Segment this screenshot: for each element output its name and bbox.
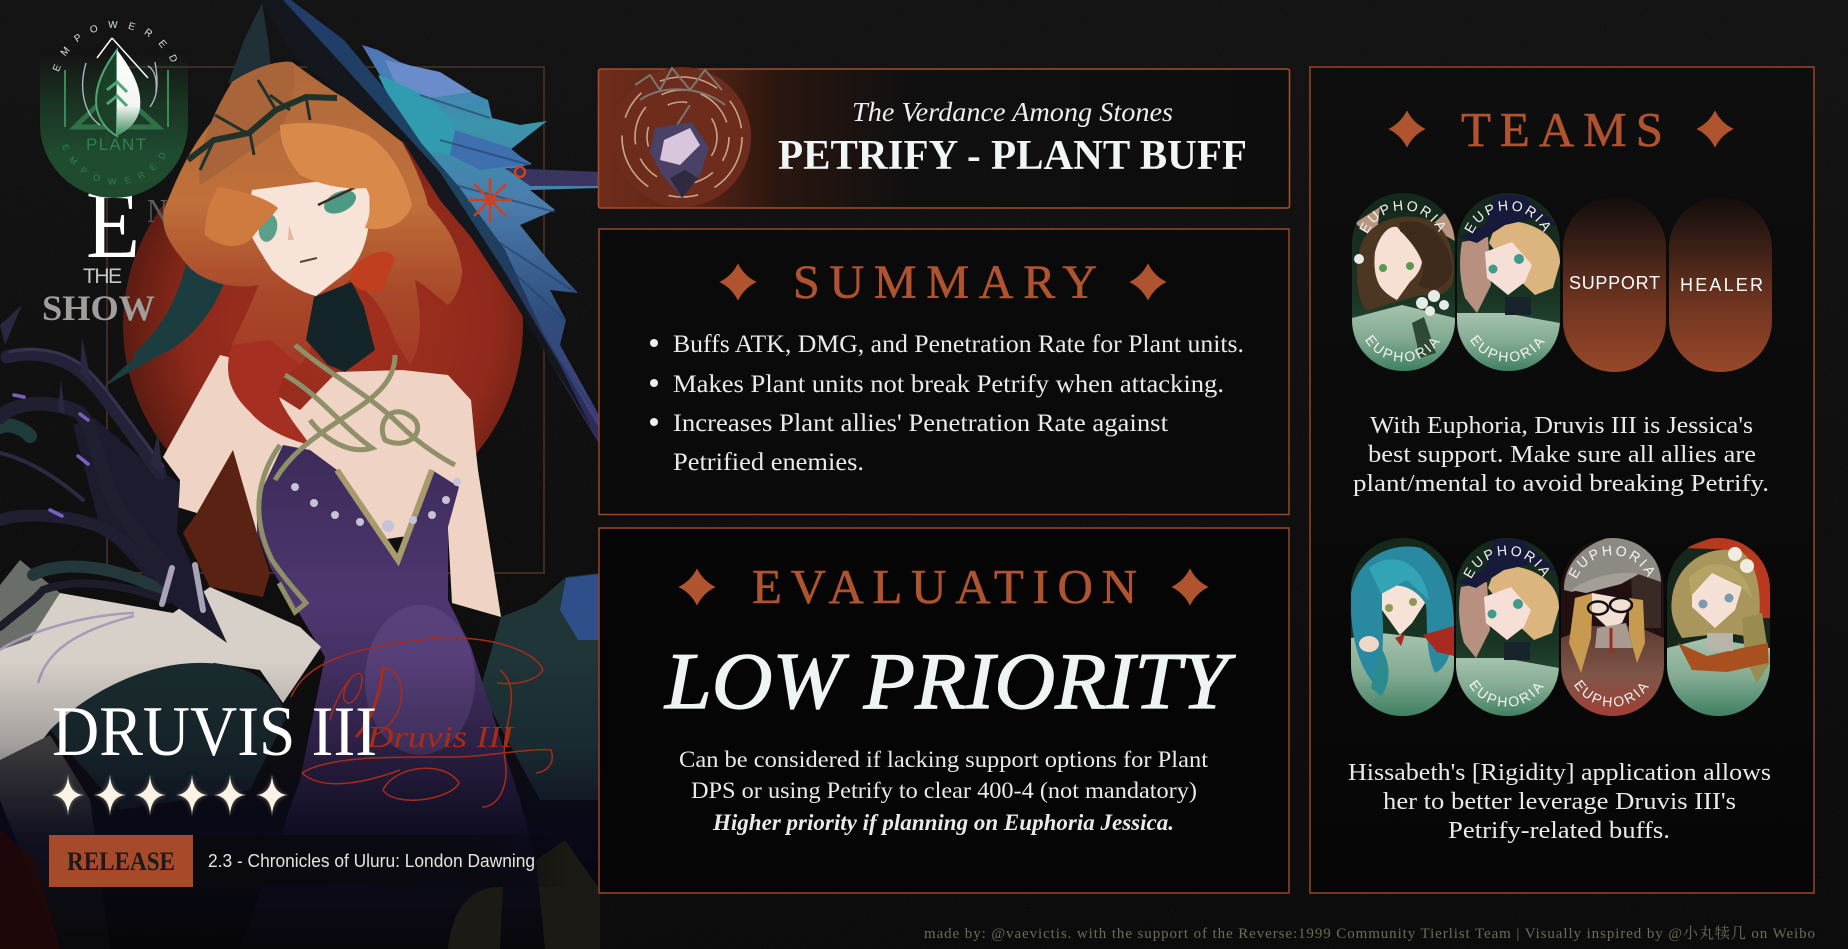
team one description xyxy=(1353,413,1769,497)
summary bullets: Petrified enemies. xyxy=(673,449,864,476)
evaluation text xyxy=(679,747,1209,835)
right wing xyxy=(480,573,600,800)
asterisk mark xyxy=(468,167,525,222)
panel: teams xyxy=(1309,66,1815,894)
element name: PLANT xyxy=(86,135,146,154)
buff title: PETRIFY - PLANT BUFF xyxy=(778,133,1247,179)
evaluation heading: EVALUATION xyxy=(752,559,1137,614)
icon: petrify stone xyxy=(613,67,751,207)
evaluation text: DPS or using Petrify to clear 400-4 (not mandatory) xyxy=(691,778,1197,803)
hat brim xyxy=(260,0,660,520)
portrait: euphoria jessica second team: EUPHORIA xyxy=(1469,680,1544,707)
summary bullets: Makes Plant units not break Petrify when attacking. xyxy=(673,371,1224,398)
hair behind arm xyxy=(183,450,270,597)
face xyxy=(246,175,370,296)
lower left drape xyxy=(0,735,110,949)
backdrop title letters: THE xyxy=(83,265,122,288)
portrait: euphoria brown hair: EUPHORIA xyxy=(1359,200,1445,234)
hair lock over shoulder xyxy=(228,340,310,445)
red circle xyxy=(123,125,523,525)
neck collar xyxy=(306,282,375,372)
dark sleeve xyxy=(50,663,285,810)
decorative frame xyxy=(107,67,544,573)
fringe xyxy=(199,62,412,292)
release bar: RELEASE xyxy=(67,847,175,876)
gold neckline trim xyxy=(337,470,432,560)
capsule: support: SUPPORT xyxy=(1569,273,1660,293)
signature flourish: Druvis III xyxy=(366,719,515,754)
portrait: euphoria jessica xyxy=(1457,193,1560,371)
summary heading xyxy=(720,256,1166,309)
thorn claw xyxy=(0,305,227,643)
team two description xyxy=(1348,760,1771,844)
team two description: Petrify-related buffs. xyxy=(1448,818,1670,844)
portrait: euphoria jessica second team xyxy=(1456,538,1559,716)
backdrop title letters: E xyxy=(86,171,140,278)
teams heading xyxy=(1389,102,1733,157)
character illustration xyxy=(0,0,660,949)
panel: summary xyxy=(599,229,1289,514)
evaluation text: Higher priority if planning on Euphoria Jessica. xyxy=(712,810,1174,835)
portrait: euphoria jessica: EUPHORIA xyxy=(1470,334,1545,362)
lower gear and drape xyxy=(448,840,600,949)
panel: evaluation xyxy=(599,528,1289,893)
plant leaf xyxy=(96,38,148,136)
backdrop title letters: NT xyxy=(147,193,185,230)
element logo: plant xyxy=(40,21,188,198)
portrait: red hat blonde xyxy=(1667,536,1770,716)
footer credit: made by: @vaevictis. with the support of the Reverse:1999 Community Tierlist Team | Visually inspired by @小丸犊几 on Weibo xyxy=(924,924,1815,942)
portrait: euphoria brown hair: EUPHORIA xyxy=(1365,334,1440,362)
logo arc text: EMPOWERED xyxy=(52,21,177,72)
torso skin xyxy=(163,355,501,617)
evaluation text: Can be considered if lacking support options for Plant xyxy=(679,747,1209,772)
summary bullets xyxy=(650,331,1244,476)
release bar: 2.3 - Chronicles of Uluru: London Dawning xyxy=(208,851,535,871)
backdrop title letters xyxy=(42,171,185,328)
portrait: euphoria glasses: EUPHORIA xyxy=(1574,680,1649,707)
portrait: euphoria glasses xyxy=(1561,538,1664,716)
team one description: best support. Make sure all allies are xyxy=(1368,442,1756,468)
priority rating: LOW PRIORITY xyxy=(664,638,1236,726)
buff subtitle: The Verdance Among Stones xyxy=(852,97,1173,127)
gold rope xyxy=(259,345,455,612)
team two description: Hissabeth's [Rigidity] application allows xyxy=(1348,760,1771,786)
hat horn xyxy=(228,3,272,84)
hair xyxy=(163,62,462,445)
character name: DRUVIS III xyxy=(52,693,377,771)
capsule: healer xyxy=(1669,197,1772,372)
portrait: euphoria jessica second team: EUPHORIA xyxy=(1463,546,1549,578)
ghost leaves xyxy=(83,62,157,125)
release bar xyxy=(49,835,573,887)
portrait: hissabeth xyxy=(1351,538,1454,716)
dress xyxy=(240,445,560,949)
thorn crown xyxy=(188,80,337,170)
dress studs xyxy=(291,478,461,532)
capsule: support xyxy=(1563,197,1666,372)
portrait: euphoria jessica: EUPHORIA xyxy=(1464,200,1550,234)
capsule: healer: HEALER xyxy=(1680,275,1763,295)
rarity stars xyxy=(52,774,288,816)
hat feathers xyxy=(362,45,600,445)
white mantle xyxy=(0,560,321,770)
portrait: euphoria brown hair xyxy=(1352,193,1455,371)
logo bars xyxy=(65,70,168,127)
logo lower arc text: EMPOWERED xyxy=(62,144,166,184)
portrait: euphoria glasses: EUPHORIA xyxy=(1568,546,1654,578)
teams heading: TEAMS xyxy=(1461,102,1663,157)
team two description: her to better leverage Druvis III's xyxy=(1383,789,1736,815)
teal wing ribbon xyxy=(103,245,226,387)
summary bullets: Buffs ATK, DMG, and Penetration Rate for Plant units. xyxy=(673,331,1244,358)
panel: header buff xyxy=(598,67,1290,208)
summary heading: SUMMARY xyxy=(793,256,1097,309)
logo triangle xyxy=(75,88,158,127)
summary bullets: Increases Plant allies' Penetration Rate against xyxy=(673,410,1168,437)
team one description: With Euphoria, Druvis III is Jessica's xyxy=(1370,413,1753,439)
bottom fade xyxy=(0,660,600,949)
backdrop title letters: SHOW xyxy=(42,288,155,328)
signature flourish xyxy=(291,638,552,807)
team one description: plant/mental to avoid breaking Petrify. xyxy=(1353,471,1769,497)
